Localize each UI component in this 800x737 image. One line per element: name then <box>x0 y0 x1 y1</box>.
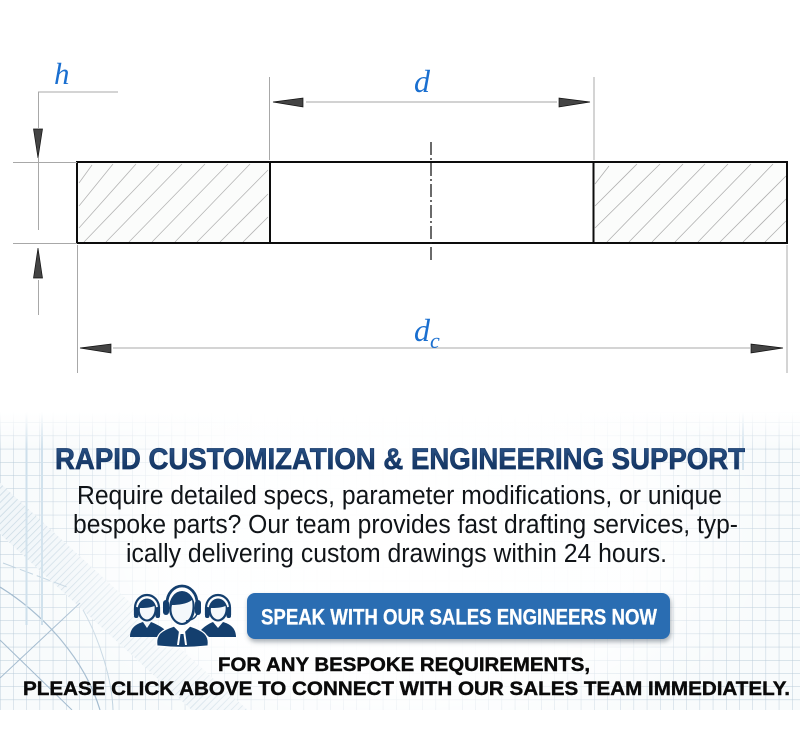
button: speak with our sales engineers <box>247 593 670 639</box>
footer text: FOR ANY BESPOKE REQUIREMENTS, <box>218 655 590 676</box>
hatched section: left <box>78 163 269 242</box>
dimension label: dc: c <box>430 328 440 353</box>
button: speak with our sales engineers: SPEAK WITH OUR SALES ENGINEERS NOW <box>261 604 657 630</box>
extension and dimension lines <box>13 77 787 373</box>
dimension label: h: h <box>54 56 70 91</box>
footer text: PLEASE CLICK ABOVE TO CONNECT WITH OUR SALES TEAM IMMEDIATELY. <box>23 679 790 700</box>
arrows <box>34 98 783 353</box>
centre agent <box>157 586 208 648</box>
heading: RAPID CUSTOMIZATION & ENGINEERING SUPPORT <box>55 443 745 476</box>
body text <box>73 482 738 568</box>
body text: bespoke parts? Our team provides fast drafting services, typ- <box>73 511 738 539</box>
dimension label: d: d <box>414 63 431 99</box>
icon: three support agents with headsets <box>130 586 236 648</box>
technical drawing: washer cross section <box>13 56 787 373</box>
hatched section: right <box>594 163 786 242</box>
body text: ically delivering custom drawings within 24 hours. <box>126 540 667 568</box>
blueprint background <box>0 412 800 714</box>
call-to-action band <box>0 412 800 714</box>
footer text <box>23 655 790 700</box>
washer outline <box>77 162 787 243</box>
right agent <box>201 595 236 637</box>
left agent <box>130 595 165 637</box>
body text: Require detailed specs, parameter modifications, or unique <box>77 482 722 510</box>
dimension label: dc: d <box>414 312 430 348</box>
centre line <box>430 142 432 263</box>
